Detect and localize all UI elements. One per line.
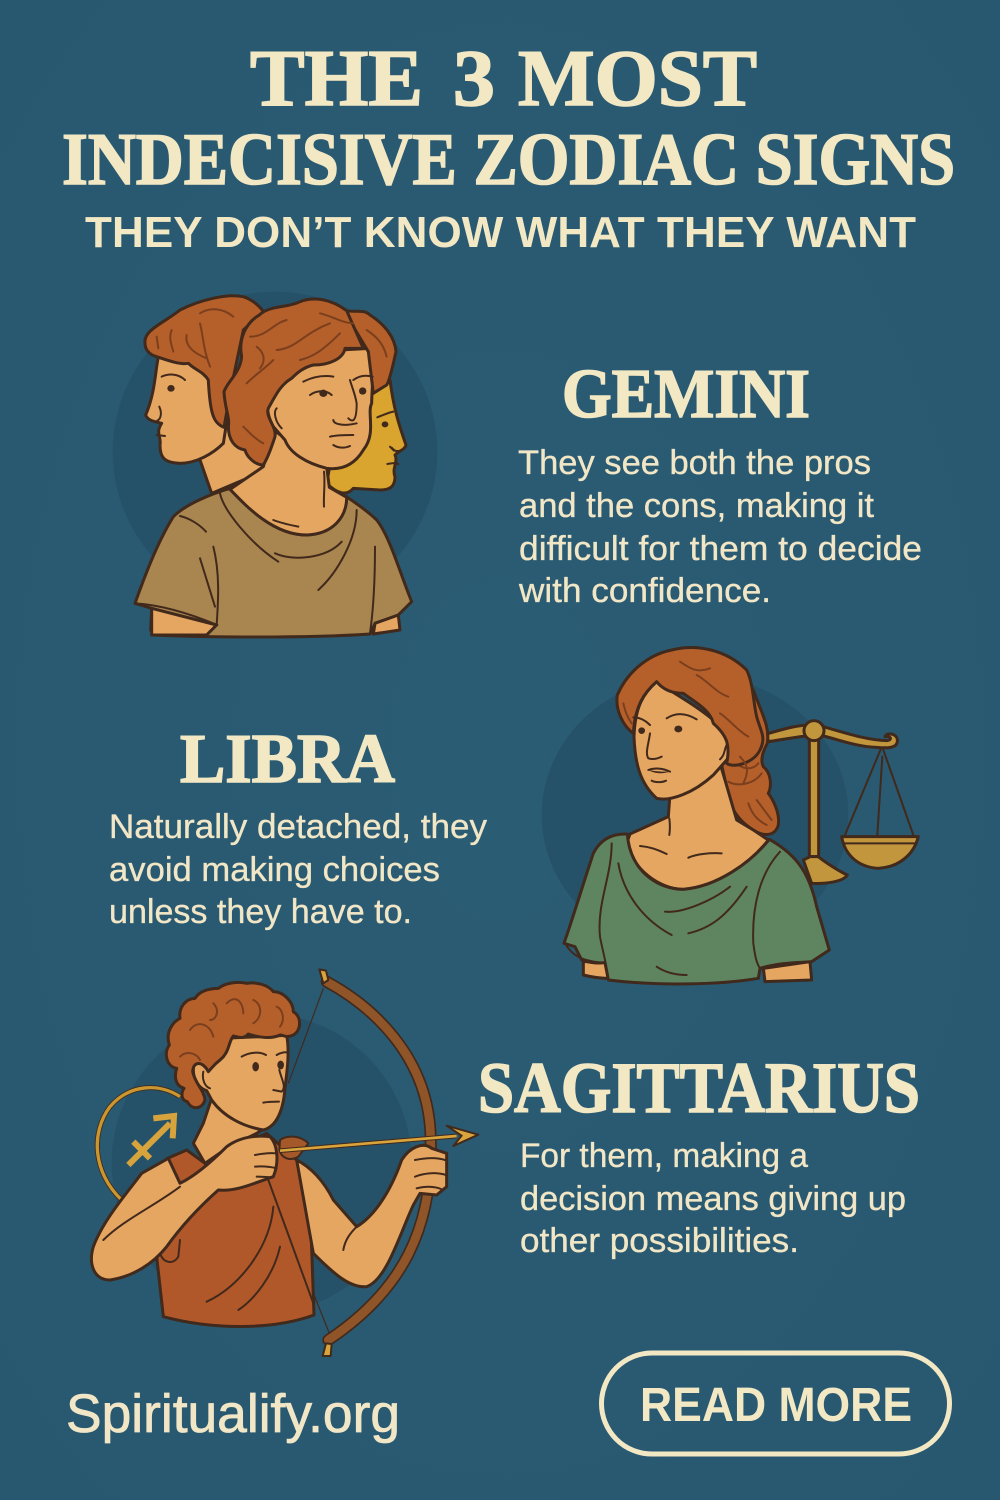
illustration: Gemini twins [113,292,437,637]
neck [230,430,347,535]
Sagittarius description [520,1137,906,1260]
Gemini description: difficult for them to decide [519,530,922,568]
icon: sagittarius symbol [97,1088,180,1200]
head [193,1035,288,1130]
shirt [135,488,412,637]
illustration: Sagittarius archer [91,969,478,1356]
green tunic [564,834,829,984]
Gemini description: with confidence. [518,572,771,610]
Gemini description: and the cons, making it [519,487,875,525]
arm skin [583,962,812,982]
Gemini heading: GEMINI [562,356,810,433]
Sagittarius heading: SAGITTARIUS [478,1048,920,1128]
front hair [224,299,363,465]
arrow [279,1126,478,1159]
title line 1: THE [250,35,423,123]
Sagittarius description: For them, making a [520,1137,808,1175]
tunic folds [565,843,780,978]
title line 1: MOST [518,35,757,123]
tunic [157,1133,314,1326]
Sagittarius description: other possibilities. [520,1222,799,1260]
drawing arm and hand [91,1136,277,1280]
Libra description [109,808,487,931]
Gemini description [518,444,922,610]
shirt folds [135,493,375,633]
left profile head [145,296,267,493]
Gemini description: They see both the pros [518,444,871,482]
back face in yellow [327,380,406,493]
face features [203,1052,288,1103]
Libra heading: LIBRA [180,721,395,798]
Libra description: Naturally detached, they [109,808,487,846]
subtitle: THEY DON’T KNOW WHAT THEY WANT [85,208,916,257]
hair back [710,690,779,835]
arm skin [152,608,400,635]
Libra description: avoid making choices [109,851,440,889]
back hair right [343,310,396,393]
illustration: Libra woman with scales [542,647,918,984]
Libra description: unless they have to. [109,893,412,931]
hair front [617,647,763,765]
title line 1: 3 [453,35,495,123]
read more button: READ MORE [640,1379,912,1432]
bow string [268,988,330,1335]
Sagittarius description: decision means giving up [520,1180,906,1218]
curly hair [166,982,300,1108]
neck and chest [627,763,768,889]
front face features [275,376,373,448]
title block [62,35,955,257]
neck [193,1087,277,1163]
face [634,682,734,799]
read more button [602,1353,950,1454]
right arm and hand [297,1145,447,1287]
title line 1 [250,35,757,123]
icon: balance scales [767,721,918,883]
face features [633,714,727,782]
front face [267,348,373,469]
bow [319,969,431,1356]
brand name: Spiritualify.org [66,1384,400,1444]
